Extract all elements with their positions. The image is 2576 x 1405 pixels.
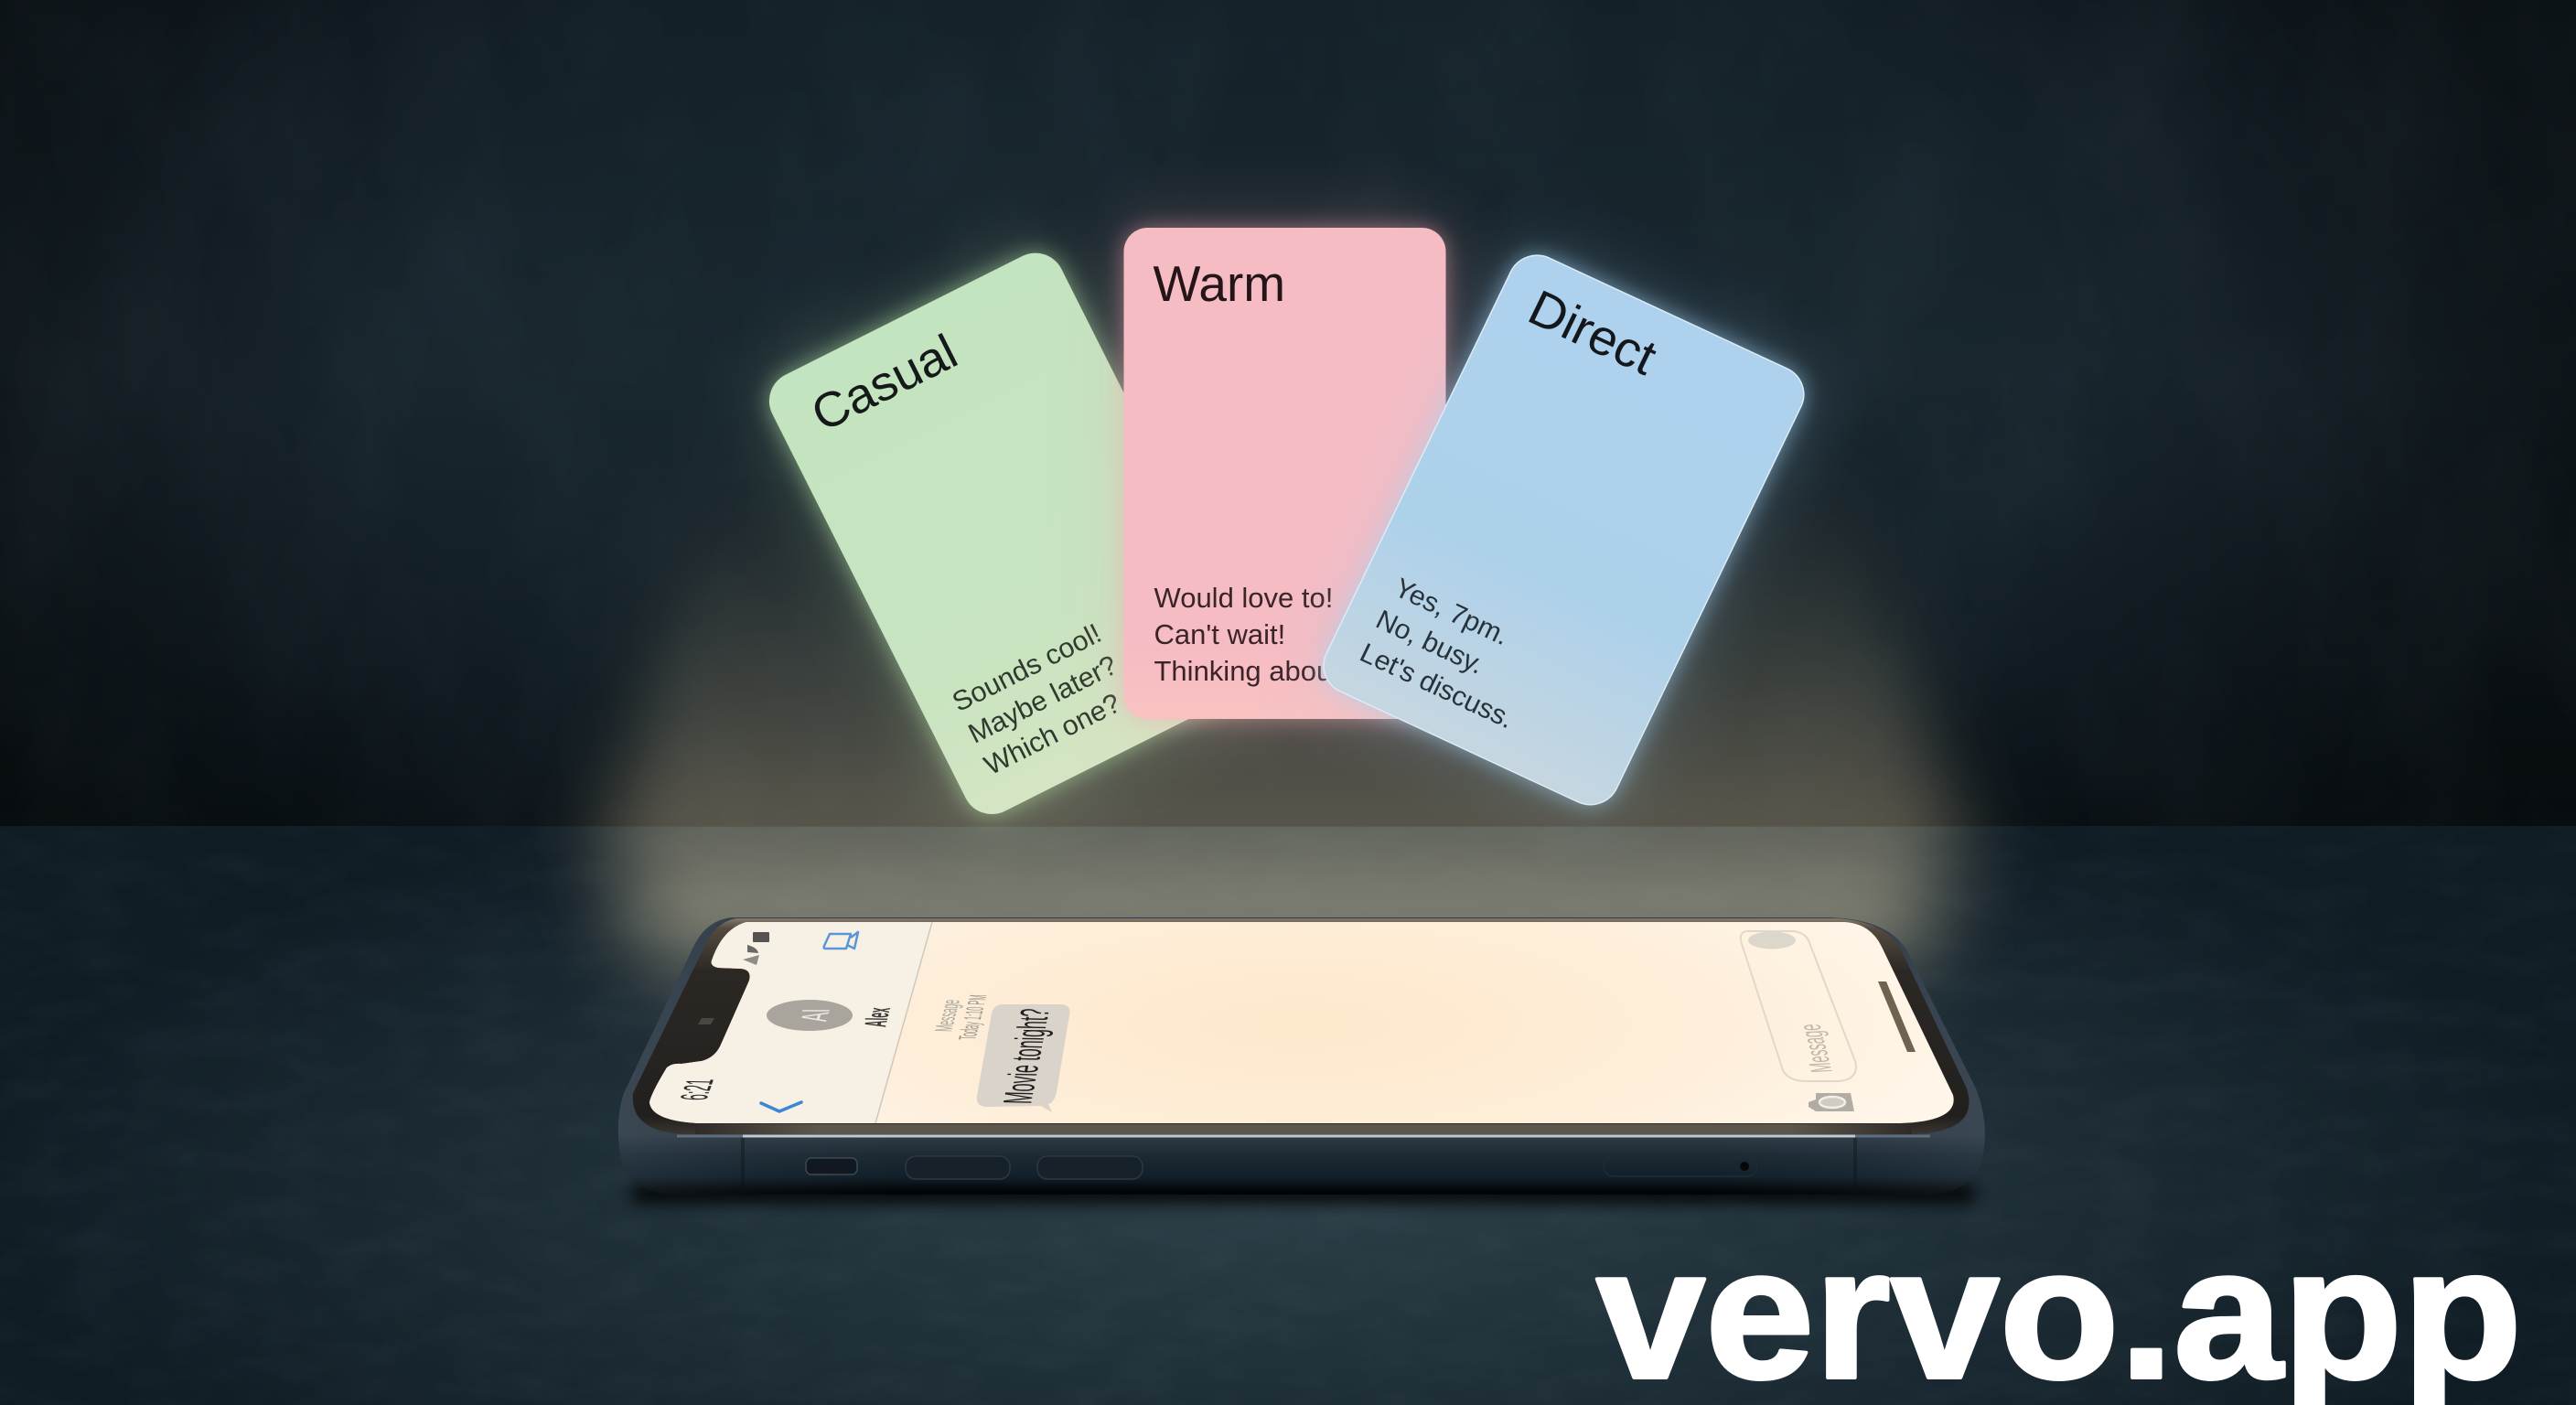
Direct title: Direct [1520,279,1665,386]
Warm title: Warm [1153,255,1285,312]
message label: Message [930,1000,966,1032]
contact avatar [767,1000,853,1031]
Casual card face [759,243,1268,824]
timestamp: Today 1:10 PM [954,994,993,1040]
battery icon [753,932,769,942]
signal icon [743,955,759,965]
send button [1748,931,1796,949]
input placeholder: Message [1793,1024,1840,1073]
contact name: Alex [858,1007,897,1027]
Direct wide glow [1314,246,1813,814]
message bubble [977,1004,1070,1112]
Direct reply options [1356,572,1551,735]
Warm reply options: Thinking about... [1154,655,1364,687]
avatar initials: Al [792,1009,838,1022]
icon: back chevron [761,1102,801,1111]
bubble text: Movie tonight? [996,1008,1059,1104]
screen background [649,922,1954,1123]
Casual reply options: Maybe later? [963,649,1122,750]
mute switch [806,1158,857,1174]
Warm reply options: Can't wait! [1154,618,1285,650]
Casual title: Casual [803,324,966,442]
Casual reply options: Which one? [980,687,1125,781]
phone body [618,917,1985,1195]
Casual reply options [948,617,1138,781]
status bar time: 6:21 [671,1078,723,1100]
status icons [743,932,769,965]
antenna bands [743,1138,1855,1192]
card: Direct [1314,246,1813,814]
Warm wide glow [1123,228,1445,719]
sim tray outline [1604,1156,1757,1176]
sim pin hole [1740,1162,1749,1171]
wifi icon [747,945,758,953]
phone bezel [633,918,1969,1134]
card: Warm [1123,228,1445,719]
card: Casual [759,243,1268,824]
Direct reply options: No, busy. [1371,605,1488,681]
background: tabletop surface [0,826,2576,1405]
phone drop shadow [631,1185,1976,1202]
phone [618,915,1985,1195]
notch speaker [698,1018,714,1024]
message input field [1741,931,1856,1081]
lit bottom bezel strip [695,1124,1912,1134]
Warm reply options: Would love to! [1154,582,1333,614]
phone screen [649,922,1954,1123]
Casual reply options: Sounds cool! [948,617,1106,718]
metal edge highlight [677,1134,1930,1138]
volume button up [906,1156,1010,1179]
Casual tight glow [759,243,1268,824]
screen light halo [732,916,1848,921]
Warm reply options [1154,582,1364,687]
icon: video call [824,932,858,949]
Direct reply options: Yes, 7pm. [1390,573,1514,651]
Direct card face [1314,246,1813,814]
warm light beam on wall [564,509,1998,827]
Casual wide glow [759,243,1268,824]
volume button down [1037,1156,1143,1179]
header divider [875,922,932,1123]
home indicator [1878,981,1916,1052]
conversation header panel [649,922,926,1123]
phone body corner sheen [618,917,1985,1195]
Warm card face [1123,228,1445,719]
Direct reply options: Let's discuss. [1356,638,1519,735]
background: dark wall [0,0,2576,827]
warm light beam on tabletop [558,827,2003,1021]
Warm tight glow [1123,228,1445,719]
Direct tight glow [1314,246,1813,814]
icon: camera [1809,1093,1854,1111]
